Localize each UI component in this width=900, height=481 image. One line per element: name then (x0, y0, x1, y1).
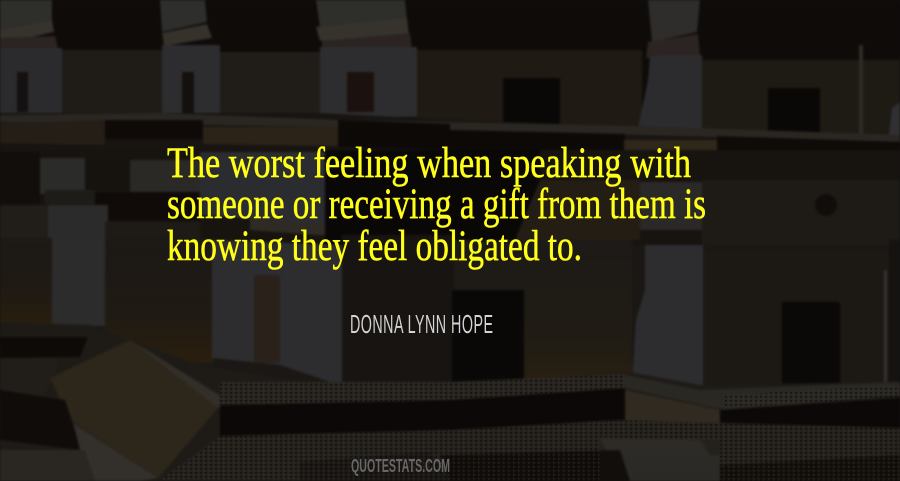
middle band (0, 113, 900, 186)
quote line 2: someone or receiving a gift from them is (167, 181, 706, 228)
quote text (167, 140, 706, 270)
ground storey (0, 235, 900, 387)
second storey (0, 150, 900, 245)
quote line 1: The worst feeling when speaking with (167, 140, 691, 187)
speckled ledge texture (160, 374, 900, 481)
author name: DONNA LYNN HOPE (350, 311, 493, 339)
ledges and rooftop (0, 322, 900, 481)
watermark: QUOTESTATS.COM (351, 456, 450, 476)
upper storey (0, 0, 900, 135)
quote line 3: knowing they feel obligated to. (167, 223, 582, 270)
small windows (17, 72, 28, 112)
